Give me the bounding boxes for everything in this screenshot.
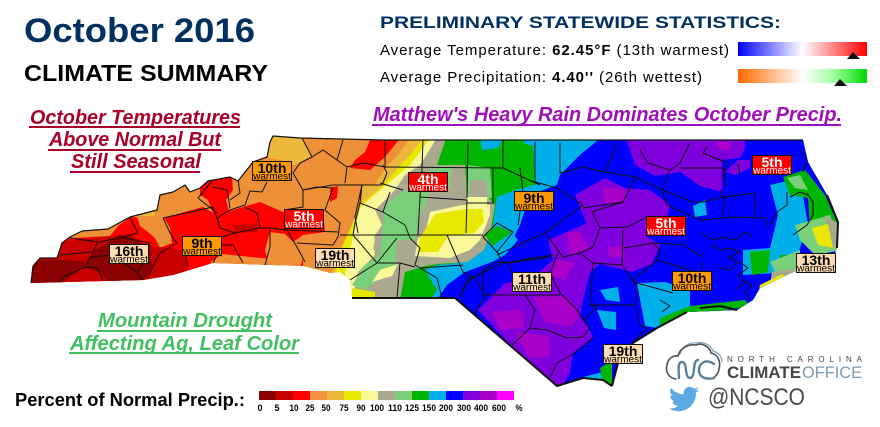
statistics heading: PRELIMINARY STATEWIDE STATISTICS: [380,13,781,32]
rank label: 11th warmest: 11th [518,271,546,287]
rank label: 10th warmest east: warmest [672,282,711,292]
rank label: 16th warmest: warmest [109,254,148,266]
rank label: 13th warmest: 13th [802,252,830,268]
legend scale labels: 50 [322,403,330,413]
legend scale labels: 125 [405,403,419,413]
legend scale labels: 300 [457,403,471,413]
callout: mountain drought [69,310,300,355]
icon: twitter bird [669,387,699,411]
rank label: 10th warmest east: 10th [678,270,706,286]
rank label: 19th warmest west: 19th [321,247,349,263]
legend scale labels: 600 [492,403,506,413]
rank label: 9th warmest east [514,190,554,212]
precipitation colour zones [32,136,837,385]
legend colour swatches [259,391,514,400]
callout: Matthew rain: Matthew's Heavy Rain Dominates October Precip. [373,104,842,126]
callout: temperatures: Still Seasonal [71,151,201,173]
temperature gradient bar [738,42,867,56]
rank label: 10th warmest east [672,270,712,292]
statistics panel [380,13,867,86]
callout: mountain drought: Affecting Ag, Leaf Color [69,333,300,355]
legend scale labels: 75 [340,403,348,413]
legend: percent of normal precipitation [15,390,522,413]
rank label: 16th warmest: 16th [115,243,143,259]
legend scale labels: 100 [370,403,384,413]
rank label: 5th warmest northeast [752,154,792,176]
county boundaries [31,136,838,386]
logo text: Climate: CLIMATE [727,363,801,382]
rank label: 4th warmest: 4th [418,171,438,187]
legend scale labels: 0 [258,403,262,413]
rank label: 4th warmest [408,171,448,194]
rank label: 13th warmest: warmest [796,264,835,274]
rank label: 5th warmest northeast: warmest [752,166,791,176]
rank label: 13th warmest [796,252,836,274]
rank label: 5th warmest central [646,215,686,238]
rank label: 5th warmest northeast: 5th [762,154,782,170]
logo text: Office: OFFICE [802,363,862,382]
precipitation statistic: Average Precipitation: 4.40'' (26th wettest) [380,69,702,86]
rank label: 4th warmest: warmest [408,182,447,194]
callout: mountain drought: Mountain Drought [98,310,273,332]
callout: temperatures [29,107,241,173]
logo text: North Carolina: NORTH CAROLINA [727,355,863,364]
rank label: 9th warmest west: warmest [182,246,221,258]
rank label: 19th warmest south [603,343,642,366]
rank label: 5th warmest west: warmest [284,220,323,230]
legend scale labels: 90 [356,403,366,413]
rank label: 10th warmest [252,160,292,182]
rank label: 19th warmest south: warmest [603,354,642,366]
temperature statistic: Average Temperature: 62.45°F (13th warmest) [380,42,729,59]
legend scale labels: 400 [474,403,488,413]
rank label: 16th warmest [109,243,148,266]
precipitation marker [834,79,847,86]
rank label: 10th warmest: 10th [258,160,286,176]
rank label: 19th warmest west [315,247,354,270]
temperature marker [847,52,860,59]
legend scale labels: 25 [306,403,314,413]
legend scale labels: 150 [422,403,436,413]
legend scale labels: % [516,403,522,413]
rank label: 9th warmest west: 9th [192,235,212,251]
legend scale labels: 5 [274,403,280,413]
callout: temperatures: October Temperatures [30,107,241,129]
twitter handle: @NCSCO [708,384,805,411]
legend title: Percent of Normal Precip.: [15,390,245,410]
title: October 2016 [24,12,255,50]
rank label: 19th warmest west: warmest [315,258,354,270]
rank label: 11th warmest: warmest [512,282,551,294]
subtitle: CLIMATE SUMMARY [24,60,268,86]
rank label: 9th warmest east: warmest [514,202,553,212]
legend scale labels [258,403,522,413]
rank label: 5th warmest central: 5th [656,215,676,231]
legend scale labels: 200 [439,403,453,413]
rank label: 9th warmest east: 9th [524,190,544,206]
rank label: 10th warmest: warmest [252,172,291,182]
map: percent of normal precipitation [30,135,839,387]
rank label: 5th warmest west: 5th [294,208,314,224]
legend scale labels: 110 [388,403,402,413]
callout: temperatures: Above Normal But [48,129,222,151]
precipitation gradient bar [738,69,867,83]
legend scale labels: 10 [290,403,298,413]
rank label: 19th warmest south: 19th [609,343,637,359]
rank label: 5th warmest central: warmest [646,226,685,238]
rank label: 5th warmest west [284,208,324,230]
icon: cloud with NC monogram [666,342,722,379]
logo: NC Climate Office [666,342,863,382]
rank label: 9th warmest west [182,235,222,258]
rank label: 11th warmest [512,271,552,294]
